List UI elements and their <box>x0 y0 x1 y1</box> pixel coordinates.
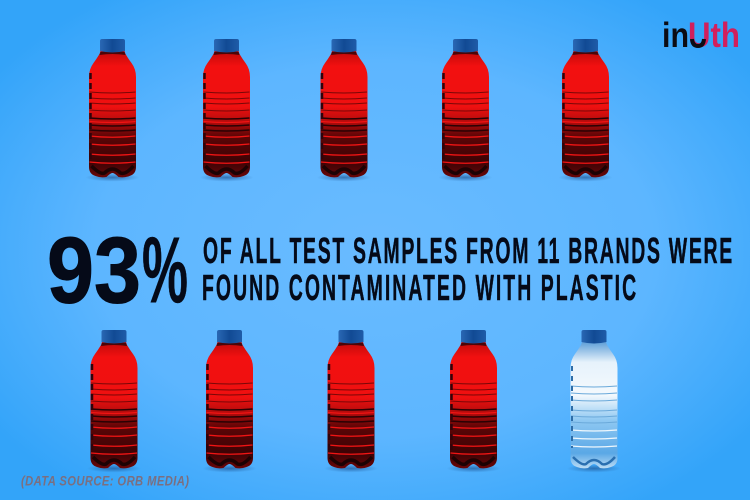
clear bottle <box>567 330 621 472</box>
bottom row of bottles <box>87 330 621 472</box>
headline text: OF ALL TEST SAMPLES FROM 11 BRANDS WERE <box>203 232 732 272</box>
bottle 4 <box>438 39 492 182</box>
bottle 9 <box>446 330 500 472</box>
bottle 6 <box>87 330 141 472</box>
bottle 5 <box>558 39 612 182</box>
logo: inUth: in <box>662 16 689 55</box>
bottle 8 <box>324 330 378 472</box>
bottle 3 <box>317 39 371 182</box>
bottle 1 <box>86 39 140 182</box>
headline statistic: 93%: 93 <box>47 218 141 322</box>
logo: inUth <box>662 16 740 55</box>
logo: inUth: Uth <box>688 16 740 55</box>
bottle 7 <box>202 330 256 472</box>
top row of red bottles <box>86 39 612 182</box>
headline text: FOUND CONTAMINATED WITH PLASTIC <box>202 269 636 309</box>
headline statistic: 93%: % <box>142 218 188 322</box>
headline text <box>202 232 732 309</box>
bottle 2 <box>200 39 254 182</box>
data source: (DATA SOURCE: ORB MEDIA) <box>21 473 189 489</box>
